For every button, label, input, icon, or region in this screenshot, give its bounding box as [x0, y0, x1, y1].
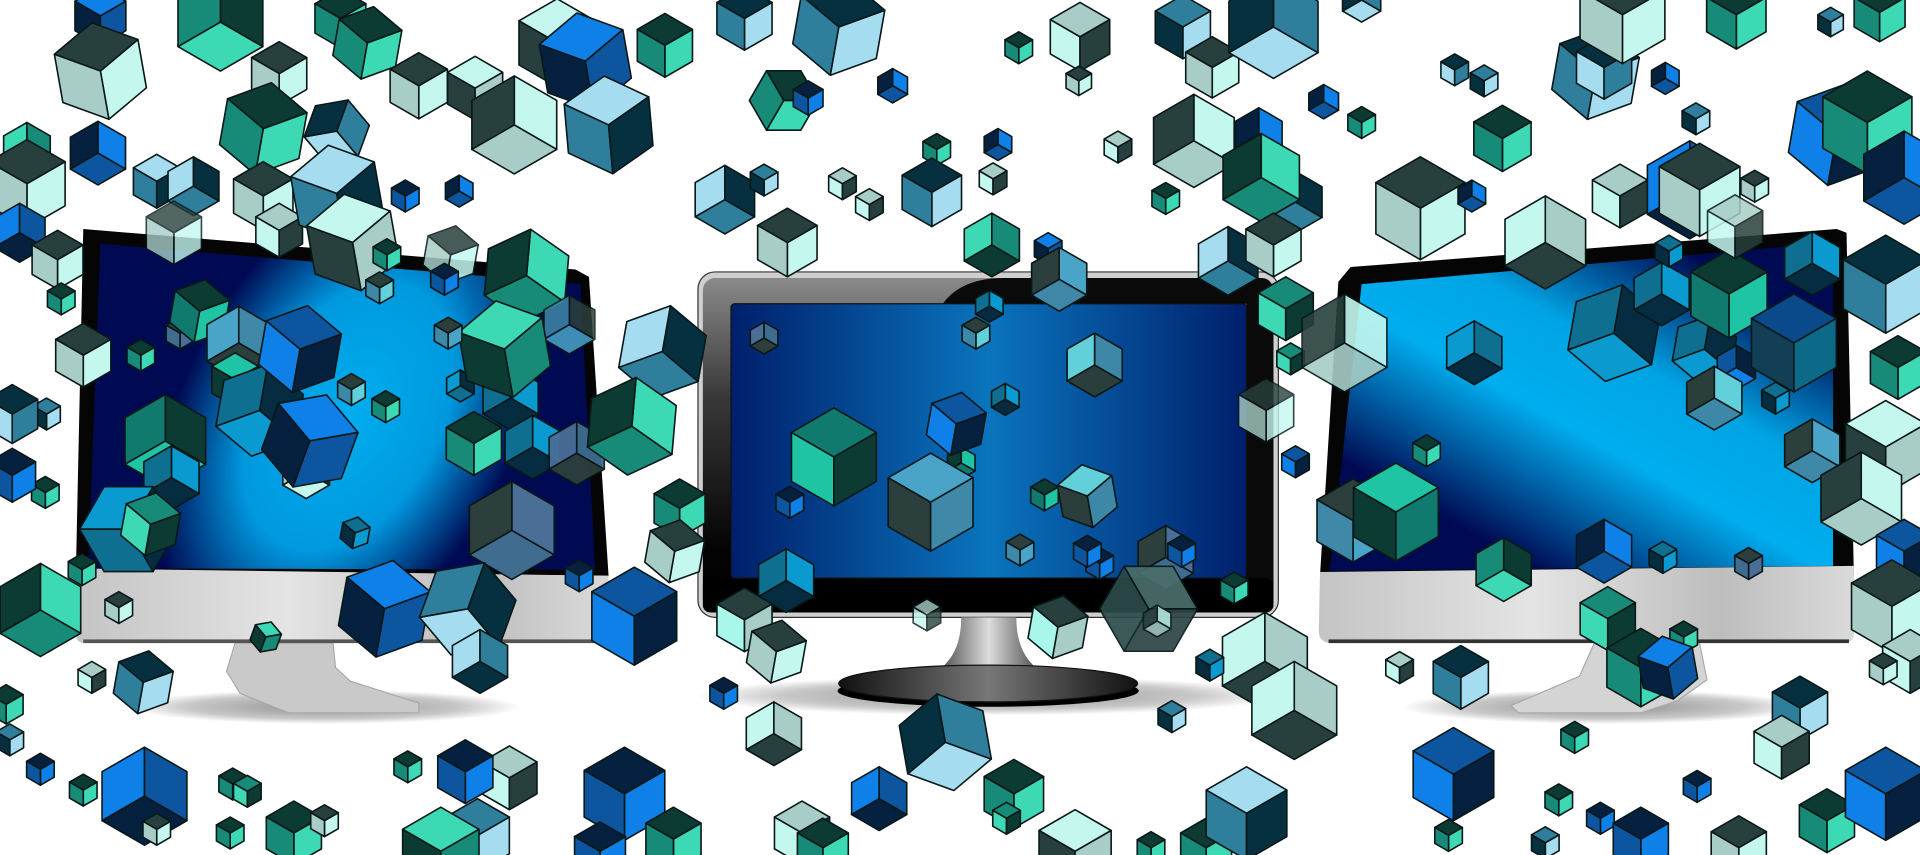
cubes on centre monitor [743, 239, 1255, 620]
cubes below and right of centre monitor [703, 269, 1408, 798]
cubes on right monitor screen [1299, 224, 1854, 601]
cubes around left monitor [0, 291, 724, 724]
left monitor [76, 229, 609, 724]
centre monitor [694, 272, 1282, 715]
right monitor [1319, 229, 1854, 724]
cubes along the bottom edge [0, 668, 1920, 855]
cubes in the upper middle [680, 0, 1139, 285]
cubes around right monitor [1354, 0, 1920, 717]
cubes upper right of centre [1133, 0, 1382, 304]
cubes on left monitor screen [67, 219, 618, 593]
cubes top left cluster [0, 0, 706, 319]
